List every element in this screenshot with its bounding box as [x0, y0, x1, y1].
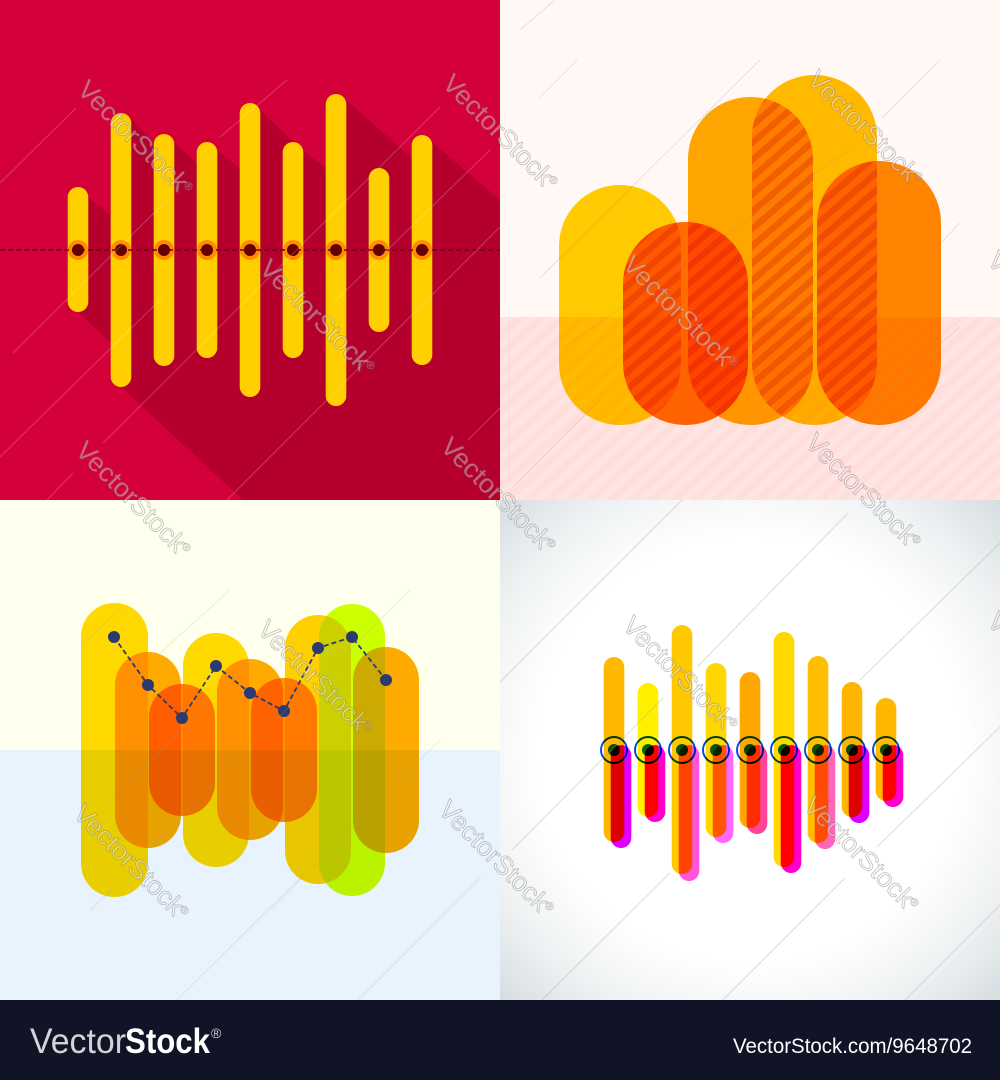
watermark text: ® — [911, 170, 925, 184]
line chart — [108, 631, 392, 724]
panel: capsules with line chart — [0, 500, 500, 1000]
watermark text: VectorStock — [437, 68, 561, 192]
panel: crimson bars with long shadow — [0, 0, 500, 500]
watermark text: ® — [546, 174, 560, 188]
capsule 5 — [817, 161, 941, 425]
striped overlaps — [623, 98, 877, 416]
capsule columns — [81, 603, 419, 897]
watermark text: VectorStock — [254, 253, 378, 377]
watermark text: VectorStock — [70, 435, 194, 559]
watermark text: VectorStock — [72, 74, 196, 198]
watermark text: VectorStock — [68, 798, 192, 922]
capsule 1 — [559, 185, 681, 425]
footer image id: VectorStock.com/9648702 — [733, 1035, 972, 1058]
watermark text: VectorStock — [800, 427, 924, 551]
watermark text: ® — [361, 720, 375, 734]
footer bar — [0, 1000, 1000, 1080]
watermark text: VectorStock — [798, 790, 922, 914]
watermark text: VectorStock — [433, 794, 557, 918]
yellow bars — [604, 625, 896, 874]
watermark text: ® — [909, 533, 923, 547]
watermark text: VectorStock — [802, 64, 926, 188]
watermark text: ® — [907, 896, 921, 910]
dot markers — [608, 744, 892, 756]
watermark text: ® — [542, 900, 556, 914]
watermark text: ® — [726, 716, 740, 730]
yellow bars — [68, 94, 432, 406]
watermark text: ® — [179, 541, 193, 555]
watermark text: ® — [177, 904, 191, 918]
footer logo — [30, 1022, 222, 1061]
watermark text: VectorStock — [435, 431, 559, 555]
capsule 3 — [688, 97, 813, 425]
watermark text: ® — [363, 359, 377, 373]
watermark text — [68, 64, 1000, 922]
capsule 4 — [752, 75, 877, 425]
footer logo: Vector — [30, 1022, 126, 1061]
watermark text: VectorStock — [617, 249, 741, 373]
dashed axis — [0, 249, 500, 251]
panel: overlapping orange capsules — [500, 0, 1000, 500]
panel: thin bars with magenta offset — [500, 500, 1000, 1000]
watermark text: ® — [544, 537, 558, 551]
ring markers — [601, 737, 899, 763]
axis markers — [0, 240, 500, 260]
footer logo: Stock — [125, 1022, 210, 1061]
magenta bars — [611, 745, 903, 881]
footer logo: ® — [211, 1025, 222, 1041]
watermark text: VectorStock — [252, 614, 376, 738]
capsule 2 — [623, 222, 748, 425]
watermark text: ® — [181, 180, 195, 194]
watermark text: VectorStock — [617, 610, 741, 734]
long shadow — [78, 100, 500, 500]
watermark text: ® — [726, 355, 740, 369]
